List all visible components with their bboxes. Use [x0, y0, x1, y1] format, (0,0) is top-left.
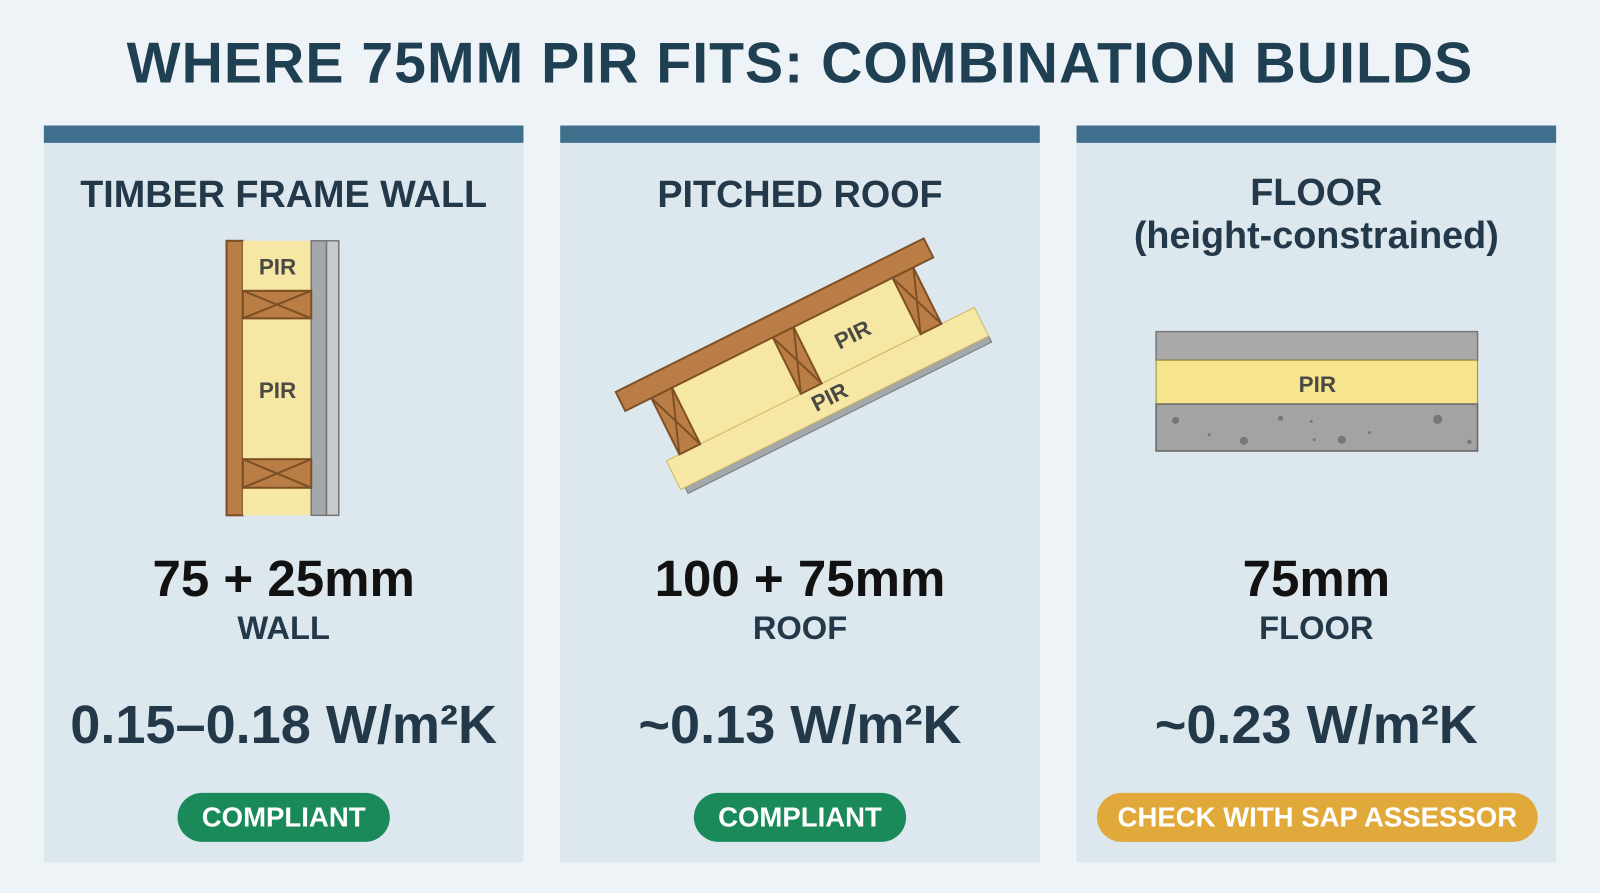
u-value: ~0.13 W/m²K [638, 695, 962, 755]
panel: timber frame wall [44, 126, 523, 862]
heading: floor: FLOOR [1250, 171, 1382, 213]
badge: check with SAP assessor: CHECK WITH SAP ASSESSOR [1118, 802, 1517, 833]
badge: compliant [178, 793, 390, 842]
thickness: 75mm [1243, 550, 1390, 607]
title: WHERE 75MM PIR FITS: COMBINATION BUILDS [127, 31, 1473, 95]
thickness: 75 + 25mm [152, 550, 415, 607]
badge: compliant: COMPLIANT [202, 802, 366, 833]
diagram: floor section: PIR [1299, 372, 1336, 397]
diagram: wall section [226, 240, 340, 516]
u-value: 0.15–0.18 W/m²K [70, 695, 497, 755]
u-value: ~0.23 W/m²K [1155, 695, 1478, 755]
diagram: floor section [1155, 330, 1478, 452]
diagram: roof section [614, 237, 992, 494]
panel: floor: FLOOR [1259, 609, 1373, 646]
diagram: roof section: PIR [807, 378, 852, 417]
diagram: wall section: PIR [259, 378, 296, 403]
badge: compliant: COMPLIANT [718, 802, 882, 833]
heading: floor [1134, 171, 1499, 256]
panel: timber frame wall: WALL [237, 609, 330, 646]
badge: compliant [694, 793, 906, 842]
panel: pitched roof: ROOF [753, 609, 847, 646]
panel: pitched roof [560, 126, 1040, 862]
diagram: wall section: PIR [259, 254, 296, 279]
heading: pitched roof: PITCHED ROOF [657, 173, 943, 215]
diagram: roof section: PIR [830, 315, 875, 354]
heading: floor: (height-constrained) [1134, 214, 1499, 256]
badge: check with SAP assessor [1097, 793, 1538, 842]
heading: timber frame wall: TIMBER FRAME WALL [80, 173, 487, 215]
thickness: 100 + 75mm [655, 550, 945, 607]
panel: floor [1077, 126, 1556, 862]
